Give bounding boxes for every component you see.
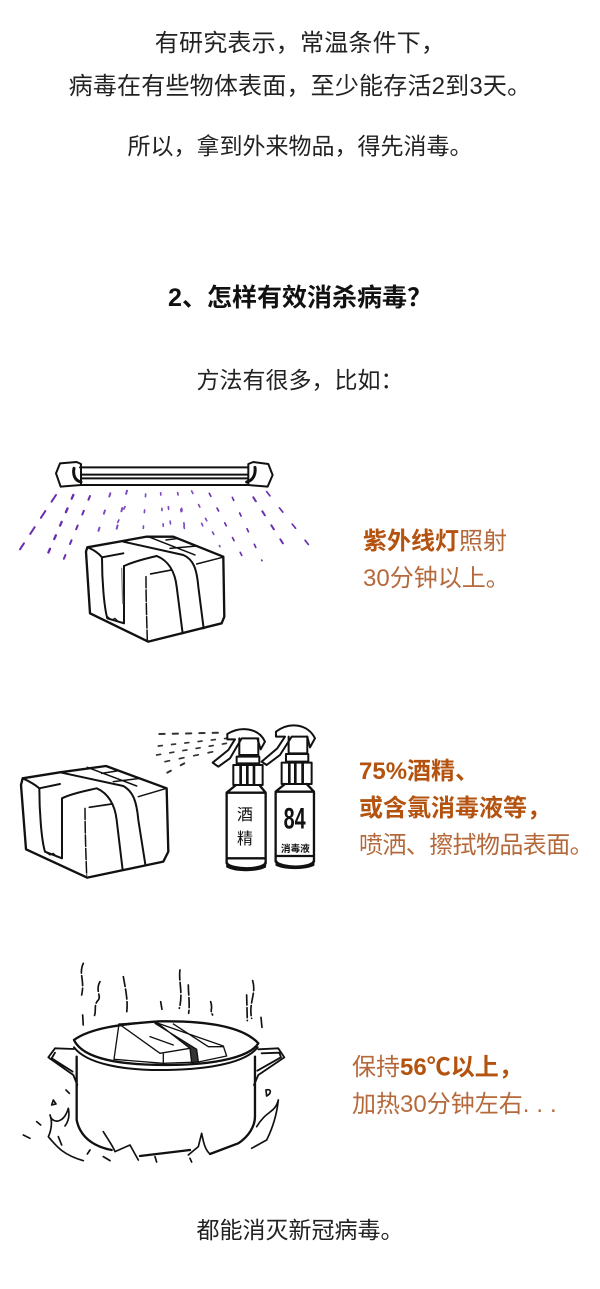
icon: 84 bottle [262, 725, 315, 868]
icon: pot [48, 1021, 284, 1156]
illustration: spray bottles and parcel [20, 724, 316, 879]
icon: parcel [21, 766, 168, 878]
steam [81, 963, 262, 1027]
intro text: 病毒在有些物体表面，至少能存活2到3天。 [69, 73, 531, 100]
text: alcohol method: 75%酒精、 [359, 758, 479, 785]
intro text [69, 30, 531, 100]
advice text: 所以，拿到外来物品，得先消毒。 [128, 133, 472, 159]
text: alcohol method: 喷洒、擦拭物品表面。 [359, 832, 593, 859]
intro text: 有研究表示，常温条件下， [155, 30, 445, 57]
text: heat method: 加热30分钟左右... [352, 1091, 564, 1118]
icon: UV lamp [56, 462, 273, 487]
text: alcohol method [359, 758, 593, 859]
closing text: 都能消灭新冠病毒。 [196, 1217, 404, 1243]
icon: parcel in pot [114, 1022, 227, 1063]
text: UV method [363, 528, 510, 592]
bottle label text 84: 84 [284, 802, 306, 835]
section heading: 2、怎样有效消杀病毒？ [168, 284, 432, 312]
text: heat method: 保持56℃以上， [352, 1054, 523, 1081]
text: UV method: 紫外线灯照射 [363, 528, 507, 555]
bottle label text: 酒 [237, 801, 253, 825]
methods intro: 方法有很多，比如： [196, 367, 404, 393]
text: heat method [352, 1054, 564, 1118]
text: UV method: 30分钟以上。 [363, 565, 510, 592]
spray mist [157, 733, 227, 773]
icon: flames [23, 1090, 278, 1162]
illustration: UV lamp over parcel [18, 461, 310, 643]
bottle label text disinfectant: 消毒液 [281, 841, 310, 855]
icon: alcohol bottle [213, 729, 266, 870]
icon: parcel [86, 537, 224, 642]
text: alcohol method: 或含氯消毒液等， [359, 795, 551, 822]
bottle label text 2: 精 [237, 825, 253, 849]
UV rays [20, 491, 311, 562]
